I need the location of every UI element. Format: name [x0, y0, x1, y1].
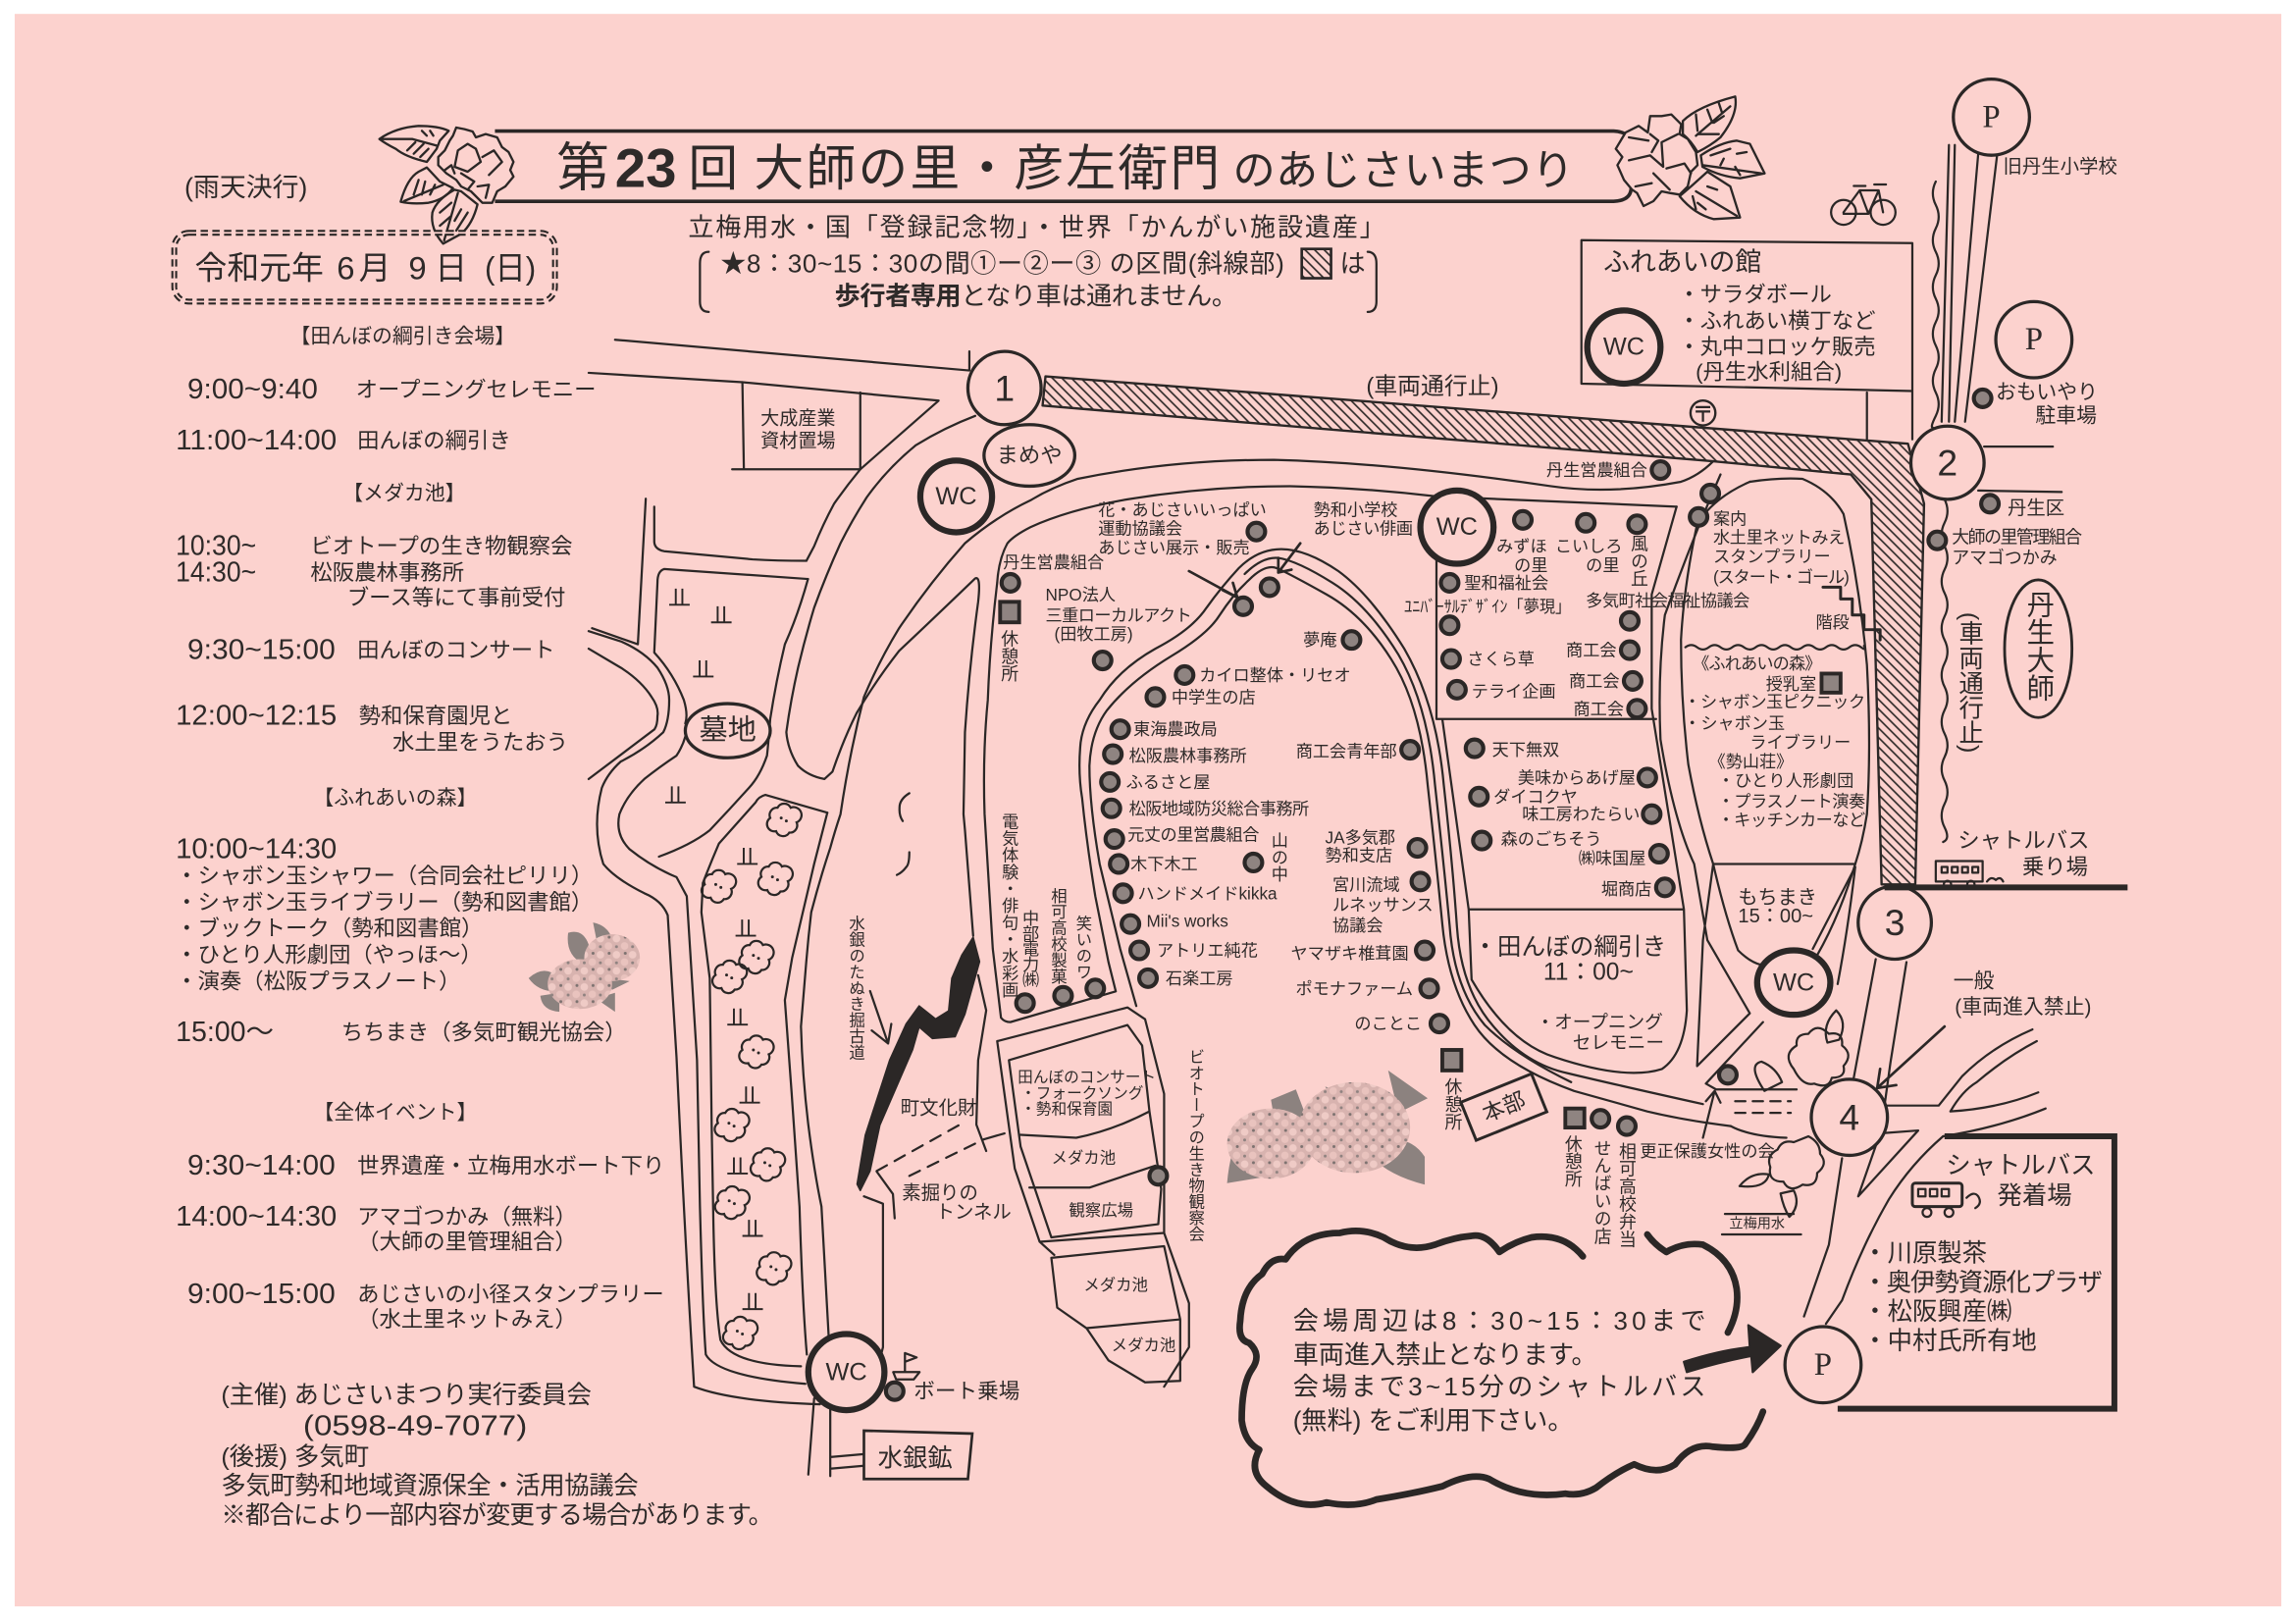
label: nyu district: 丹生区 — [2008, 497, 2064, 519]
subtitle: 立梅用水・国「登録記念物」・世界「かんがい施設遺産」 — [688, 212, 1385, 241]
parking 3 — [1785, 1327, 1861, 1403]
hydrangea picture: left — [529, 922, 640, 1012]
stalls: center column: 商工会青年部 — [1296, 742, 1397, 761]
tunnel dashes — [876, 1124, 1005, 1176]
stalls: north row: 休憩所 — [999, 629, 1018, 682]
labels: biotope ponds: 田んぼのコンサート — [1018, 1069, 1156, 1086]
stalls: west column: カイロ整体・リセオ — [1199, 665, 1351, 685]
upper west road — [589, 340, 969, 561]
mameya: まめや — [997, 444, 1063, 468]
panel: fureai forest labels: もちまき — [1738, 887, 1817, 909]
nyu daishi oval: 丹生大師 — [2022, 590, 2054, 702]
stalls: east block: 商工会 — [1574, 699, 1624, 718]
stall: senbai: せんばいの店 — [1592, 1139, 1612, 1244]
panel: fureai hall: ・ふれあい横丁など — [1678, 308, 1876, 333]
schedule: 田んぼの綱引き会場: 【田んぼの綱引き会場】 — [290, 326, 515, 348]
WC 5 — [809, 1334, 884, 1410]
stalls: vertical labels: 相可高校製菓 — [1048, 887, 1068, 984]
icon: right hydrangea decoration — [1616, 96, 1764, 219]
stalls: east block: 風の丘 — [1629, 535, 1648, 587]
strip flowers — [702, 804, 802, 1349]
label: general vehicles: (車両進入禁止) — [1955, 996, 2091, 1019]
big arrow to parking — [1684, 1326, 1781, 1372]
stalls: west column: 松阪地域防災総合事務所 — [1129, 799, 1309, 818]
stalls near honbu: 休憩所 — [1563, 1134, 1583, 1187]
schedule: ふれあいの森: ・演奏（松阪プラスノート） — [176, 969, 461, 993]
title banner: 23 — [615, 138, 676, 199]
parking 3: P — [1814, 1347, 1832, 1383]
stalls: center column — [1244, 630, 1462, 1130]
stalls: east block: 商工会 — [1569, 671, 1620, 691]
stalls: center column: ルネッサンス — [1332, 895, 1434, 915]
panel: fureai forest labels: 《ふれあいの森》 — [1693, 654, 1821, 673]
label: omoiyari parking: おもいやり — [1996, 381, 2098, 403]
inner loop — [984, 486, 1703, 1104]
stalls: north row: あじさい俳画 — [1314, 519, 1413, 539]
stalls: west column: Mii's works — [1147, 912, 1228, 931]
label: general vehicles: 一般 — [1954, 969, 1995, 992]
map roads — [589, 145, 2061, 1476]
stalls: north row: 花・あじさいいっぱい — [1098, 499, 1267, 519]
stalls: west column: ふるさと屋 — [1126, 772, 1210, 792]
panel: shuttle departure — [1838, 1136, 2114, 1409]
schedule: 田んぼの綱引き会場: 田んぼの綱引き — [357, 429, 511, 453]
schedule: 全体イベント — [176, 1102, 664, 1332]
nyu daishi oval — [2005, 580, 2072, 717]
stalls: north row: NPO法人 — [1046, 585, 1116, 604]
stalls: north row: (田牧工房) — [1054, 624, 1133, 644]
icon: left hydrangea decoration — [380, 126, 513, 243]
schedule: メダカ池: 松阪農林事務所 — [310, 560, 464, 585]
stalls: north row — [999, 460, 1669, 682]
schedule: 田んぼの綱引き会場: 11:00~14:00 — [176, 425, 337, 456]
cemetery — [685, 704, 770, 758]
labels: biotope ponds: メダカ池 — [1052, 1149, 1116, 1167]
WC 5: WC — [825, 1358, 867, 1386]
mercury mine box: 水銀鉱 — [878, 1444, 953, 1472]
schedule: ふれあいの森 — [176, 787, 627, 1048]
stalls: east block: ダイコクヤ — [1493, 787, 1578, 807]
stalls: east block: こいしろ — [1555, 537, 1623, 556]
rain note: (雨天決行) — [184, 173, 307, 202]
label: amago: 大師の里管理組合 — [1952, 528, 2082, 548]
panel: fureai hall: ふれあいの館 — [1603, 247, 1761, 277]
schedule: 全体イベント: あじさいの小径スタンプラリー — [357, 1283, 664, 1307]
panel: fureai hall: ・サラダボール — [1678, 282, 1832, 306]
point 4: 4 — [1839, 1097, 1859, 1138]
labels: rice field tug of war: 11：00~ — [1543, 959, 1634, 985]
stalls: vertical labels: 笑いのワ — [1073, 916, 1092, 979]
label: amago — [1928, 528, 2082, 568]
labels: biotope ponds: メダカ池 — [1083, 1277, 1148, 1294]
panel: fureai forest labels: ライブラリー — [1749, 733, 1851, 753]
panel: fureai forest labels: ・プラスノート演奏 — [1718, 791, 1865, 811]
stalls: north row: あじさい展示・販売 — [1098, 538, 1250, 557]
flower strip — [702, 795, 827, 1366]
stalls: west column: 中学生の店 — [1172, 687, 1256, 707]
panel: fureai forest labels: ・キッチンカーなど — [1718, 811, 1865, 830]
label: omoiyari parking: 駐車場 — [2035, 404, 2097, 427]
label: omoiyari parking — [1974, 381, 2098, 427]
schedule: 全体イベント: アマゴつかみ（無料） — [357, 1205, 577, 1230]
WC 2 — [1421, 491, 1493, 564]
stalls: north row: 丹生営農組合 — [1003, 552, 1104, 572]
bold old road — [857, 937, 979, 1190]
WC 1 — [920, 460, 992, 532]
north roads — [1942, 145, 1998, 422]
date box: 6月 — [337, 250, 391, 287]
shuttle stop: シャトルバス — [1957, 828, 2090, 853]
stalls: east block: 聖和福祉会 — [1464, 573, 1548, 593]
yard label: 大成産業 — [760, 407, 836, 429]
labels: biotope ponds: ・フォークソング — [1020, 1084, 1143, 1102]
point 2: 2 — [1937, 443, 1957, 484]
point 4 — [1811, 1079, 1888, 1155]
schedule: 全体イベント: （水土里ネットみえ） — [357, 1307, 577, 1332]
callout cloud — [1239, 1230, 1763, 1504]
notice: pedestrian only: 歩行者専用となり車は通れません。 — [835, 281, 1237, 310]
main road closed wedge — [786, 416, 979, 936]
panel: fureai forest labels: 《勢山荘》 — [1709, 752, 1793, 771]
panel: fureai forest labels: ・シャボン玉ピクニック — [1684, 692, 1865, 711]
schedule: メダカ池: 10:30~ — [176, 531, 256, 562]
stalls: center column: 休憩所 — [1442, 1077, 1462, 1130]
schedule: ふれあいの森: ちちまき（多気町観光協会） — [341, 1021, 627, 1045]
stalls: vertical labels: 中部電力㈱ — [1019, 910, 1039, 987]
yard label — [760, 407, 836, 451]
boat landing: ボート乗場 — [913, 1379, 1019, 1403]
schedule: ふれあいの森: 10:00~14:30 — [176, 834, 337, 865]
stalls: east block: さくら草 — [1467, 650, 1535, 669]
point 2 — [1910, 426, 1984, 499]
panel: fureai hall: (丹生水利組合) — [1696, 360, 1842, 385]
hydrangea picture: center — [1227, 1071, 1428, 1184]
stalls: west column: 東海農政局 — [1133, 719, 1218, 739]
point 3 — [1858, 886, 1931, 959]
label: amago: アマゴつかみ — [1952, 549, 2058, 568]
panel: fureai forest labels: 15：00~ — [1738, 906, 1813, 927]
labels: rice field tug of war: ・田んぼの綱引き — [1473, 933, 1666, 961]
schedule: メダカ池: 田んぼのコンサート — [357, 638, 555, 662]
callout cloud: 会場周辺は8：30~15：30まで — [1293, 1306, 1706, 1335]
panel: fureai forest labels: 授乳室 — [1766, 674, 1816, 694]
stalls: east block: 美味からあげ屋 — [1518, 767, 1636, 787]
panel: fureai forest labels: スタンプラリー — [1713, 547, 1831, 566]
WC 2: WC — [1436, 513, 1478, 541]
WC 4: WC — [1773, 969, 1814, 996]
panel: fureai forest labels: 階段 — [1815, 612, 1850, 632]
schedule: ふれあいの森: 【ふれあいの森】 — [313, 787, 477, 810]
panel: fureai forest labels: 案内 — [1713, 508, 1747, 528]
stalls: west column — [1101, 665, 1351, 988]
stalls: north row: 運動協議会 — [1098, 519, 1182, 539]
schedule: 全体イベント: 9:00~15:00 — [187, 1279, 336, 1310]
stalls: east block: みずほ — [1496, 537, 1547, 556]
stalls: east block: の里 — [1514, 555, 1547, 575]
stalls: center column: 協議会 — [1332, 916, 1383, 935]
stalls: east block: 商工会 — [1566, 641, 1617, 660]
schedule: 田んぼの綱引き会場: 9:00~9:40 — [187, 374, 318, 405]
title banner: 第 — [556, 139, 609, 198]
date box: 9日 — [408, 250, 467, 287]
stalls: center column: ポモナファーム — [1296, 978, 1413, 998]
arrows — [870, 544, 1945, 1138]
panel: shuttle departure: ・奥伊勢資源化プラザ — [1862, 1269, 2103, 1296]
small field flowers near point 4 — [1740, 1011, 1849, 1217]
label: honbu — [1461, 1073, 1546, 1140]
organizers: (後援) 多気町 — [221, 1443, 369, 1471]
callout cloud: (無料) をご利用下さい。 — [1293, 1406, 1573, 1436]
icon: post office — [1691, 400, 1715, 426]
field lane — [592, 498, 646, 645]
stalls: west column: 元丈の里営農組合 — [1127, 825, 1259, 845]
schedule: メダカ池: 水土里をうたおう — [392, 730, 568, 755]
stalls: east block: 天下無双 — [1492, 740, 1559, 759]
schedule: 全体イベント: 【全体イベント】 — [313, 1102, 477, 1125]
labels: rice field tug of war — [1473, 933, 1666, 1053]
schedule: メダカ池: 14:30~ — [176, 556, 256, 588]
organizers — [221, 1382, 773, 1530]
rice plant marks — [665, 589, 763, 1309]
schedule: メダカ池: ビオトープの生き物観察会 — [310, 534, 573, 558]
stall: kosei hogo — [1640, 1066, 1775, 1161]
schedule: メダカ池: ブース等にて事前受付 — [347, 585, 565, 609]
stalls: east block: ㈱味国屋 — [1579, 848, 1645, 867]
stalls: east block: テライ企画 — [1472, 681, 1556, 701]
WC 1: WC — [935, 483, 977, 510]
stalls: vertical labels — [999, 812, 1104, 1012]
below WC lanes — [809, 1398, 863, 1476]
stalls: center column: 夢庵 — [1303, 630, 1337, 650]
schedule: ふれあいの森: 15:00～ — [176, 1017, 274, 1048]
labels: rice field tug of war: セレモニー — [1573, 1032, 1664, 1053]
title banner: 大師の里・彦左衛門 — [755, 140, 1220, 196]
organizers: (0598-49-7077) — [303, 1411, 527, 1442]
west lanes — [589, 631, 820, 1404]
upper field — [654, 569, 808, 723]
stalls: north row: 勢和小学校 — [1314, 499, 1397, 519]
east blocks — [1436, 506, 1687, 1073]
notice: pedestrian only — [700, 249, 1377, 312]
title banner: のあじさいまつり — [1233, 148, 1574, 195]
vertical (vehicles closed): (車両通行止) — [1956, 612, 1984, 753]
schedule: 田んぼの綱引き会場 — [176, 326, 596, 456]
schedule: 全体イベント: （大師の里管理組合） — [357, 1230, 577, 1254]
parking 1: P — [1982, 99, 2001, 134]
labels: historic road: 素掘りの — [902, 1182, 978, 1204]
labels: historic road — [847, 916, 1012, 1224]
labels: biotope ponds — [1018, 1048, 1205, 1354]
point 1 — [967, 351, 1041, 425]
stalls: north row: 丹生営農組合 — [1546, 460, 1647, 480]
river wavy lines — [1932, 182, 1948, 842]
schedule: ふれあいの森: ・シャボン玉ライブラリー（勢和図書館） — [176, 890, 593, 915]
stalls: west column: 松阪農林事務所 — [1129, 746, 1247, 765]
schedule: ふれあいの森: ・シャボン玉シャワー（合同会社ピリリ） — [176, 864, 593, 888]
stalls: east block: 多気町社会福祉協議会 — [1586, 591, 1749, 610]
stalls: center column: のことこ — [1354, 1014, 1422, 1033]
labels: biotope ponds: メダカ池 — [1112, 1336, 1175, 1354]
stalls: east block: 森のごちそう — [1501, 829, 1602, 849]
stalls: west column: 石楽工房 — [1166, 969, 1233, 988]
materials yard — [732, 382, 861, 469]
organizers: 多気町勢和地域資源保全・活用協議会 — [221, 1473, 639, 1500]
pond area — [997, 1008, 1189, 1387]
stalls: east block — [1404, 511, 1749, 899]
stalls: west column: ハンドメイドkikka — [1138, 883, 1278, 903]
stalls: vertical labels: 電気体験・俳句・水彩画 — [999, 812, 1018, 998]
parens near old road — [897, 793, 910, 875]
panel: fureai forest labels — [1684, 485, 1865, 927]
hatched closed road — [1043, 377, 1924, 884]
label: former school: 旧丹生小学校 — [2004, 156, 2117, 178]
point 3: 3 — [1885, 902, 1905, 943]
label: nyu district — [1981, 495, 2064, 519]
stalls: center column: 宮川流域 — [1332, 874, 1400, 894]
schedule: メダカ池: 12:00~12:15 — [176, 701, 337, 732]
labels: historic road: トンネル — [936, 1202, 1012, 1224]
title banner: 回 — [688, 140, 738, 196]
stalls: center column: 山の中 — [1269, 832, 1288, 882]
date box: 令和元年 — [195, 250, 324, 287]
stalls: west column: アトリエ純花 — [1157, 941, 1258, 961]
stalls: north row: 三重ローカルアクト — [1046, 605, 1192, 625]
stalls near honbu — [1563, 1109, 1585, 1187]
parking 2: P — [2025, 322, 2043, 357]
callout cloud: 会場まで3~15分のシャトルバス — [1293, 1372, 1706, 1401]
panel: fureai forest labels: (スタート・ゴール) — [1713, 567, 1850, 587]
shuttle stop: 乗り場 — [2022, 855, 2088, 879]
label: honbu: 本部 — [1479, 1087, 1529, 1126]
schedule: ふれあいの森: ・ひとり人形劇団（やっほ～） — [176, 942, 483, 967]
main road outer line and top — [801, 460, 1713, 1338]
stalls: center column: 勢和支店 — [1326, 846, 1392, 865]
labels: biotope ponds: ・勢和保育園 — [1020, 1101, 1113, 1119]
schedule: 全体イベント: 9:30~14:00 — [187, 1150, 336, 1181]
panel: shuttle departure: ・松阪興産㈱ — [1862, 1298, 2011, 1326]
icon: bicycle — [1831, 184, 1896, 225]
organizers: ※都合により一部内容が変更する場合があります。 — [221, 1502, 773, 1530]
label: tachibai canal: 立梅用水 — [1729, 1217, 1785, 1232]
stalls: west column: 木下木工 — [1130, 854, 1198, 873]
stalls: east block: 味工房わたらい — [1522, 805, 1640, 824]
labels: biotope ponds: 観察広場 — [1069, 1202, 1133, 1220]
stalls: center column: ヤマザキ椎茸園 — [1291, 943, 1409, 963]
fureai forest — [1749, 479, 1869, 965]
WC 4 — [1757, 951, 1830, 1015]
schedule: ふれあいの森: ・ブックトーク（勢和図書館） — [176, 916, 483, 941]
cemetery: 墓地 — [700, 714, 757, 747]
stalls: east block: の里 — [1586, 555, 1620, 575]
(vehicles closed) top: (車両通行止) — [1366, 373, 1499, 399]
panel: fureai forest labels: 水土里ネットみえ — [1713, 528, 1845, 548]
schedule: 全体イベント: 14:00~14:30 — [176, 1201, 337, 1232]
panel: fureai hall: WC — [1603, 334, 1644, 361]
panel: shuttle departure: シャトルバス — [1946, 1152, 2095, 1179]
labels: biotope ponds: ビオトープの生き物観察会 — [1186, 1048, 1205, 1241]
notice: pedestrian only: ★8：30~15：30の間①ー②ー③ の区間(斜線部) — [720, 249, 1284, 279]
panel: fureai hall — [1588, 247, 1876, 385]
schedule: メダカ池: 【メダカ池】 — [342, 482, 465, 504]
panel: shuttle departure: 発着場 — [1998, 1182, 2072, 1210]
schedule: メダカ池: 勢和保育園児と — [359, 704, 512, 728]
panel: fureai hall: ・丸中コロッケ販売 — [1678, 335, 1876, 359]
title banner — [495, 131, 1631, 201]
date box: (日) — [485, 250, 536, 287]
parking 1 — [1954, 79, 2029, 155]
stall: kosei hogo: 更正保護女性の会 — [1640, 1141, 1775, 1161]
labels: historic road: 水銀のたぬき掘古道 — [847, 916, 865, 1060]
shuttle stop — [1885, 828, 2127, 888]
parking 2 — [1996, 301, 2072, 378]
mameya — [984, 425, 1074, 486]
panel: shuttle departure: ・中村氏所有地 — [1862, 1328, 2037, 1355]
label: general vehicles — [1954, 969, 2091, 1019]
labels: historic road: 町文化財 — [901, 1098, 976, 1120]
yard label: 資材置場 — [760, 430, 836, 451]
organizers: (主催) あじさいまつり実行委員会 — [221, 1382, 592, 1409]
date box — [175, 233, 555, 301]
panel: fureai forest labels: ・ひとり人形劇団 — [1718, 770, 1853, 790]
panel: shuttle departure: ・川原製茶 — [1862, 1239, 1987, 1267]
labels: rice field tug of war: ・オープニング — [1536, 1012, 1663, 1032]
schedule: 全体イベント: 世界遺産・立梅用水ボート下り — [357, 1153, 664, 1178]
stalls: east block: ﾕﾆﾊﾞｰｻﾙﾃﾞｻﾞｲﾝ「夢現」 — [1404, 597, 1571, 616]
schedule: メダカ池 — [176, 482, 573, 755]
notice: pedestrian only: は — [1339, 249, 1366, 279]
stalls: east block: 堀商店 — [1601, 879, 1651, 899]
callout cloud: 車両進入禁止となります。 — [1293, 1339, 1597, 1369]
near point 4 — [1731, 1126, 1787, 1138]
schedule: 田んぼの綱引き会場: オープニングセレモニー — [356, 377, 596, 401]
stall: ouka high school: 相可高校弁当 — [1617, 1142, 1637, 1247]
boat landing — [886, 1353, 1019, 1403]
panel: fureai forest labels: ・シャボン玉 — [1684, 713, 1785, 733]
point 1: 1 — [994, 367, 1015, 408]
stalls: center column: JA多気郡 — [1326, 828, 1395, 848]
schedule: メダカ池: 9:30~15:00 — [187, 635, 336, 666]
mercury mine box — [863, 1431, 972, 1479]
